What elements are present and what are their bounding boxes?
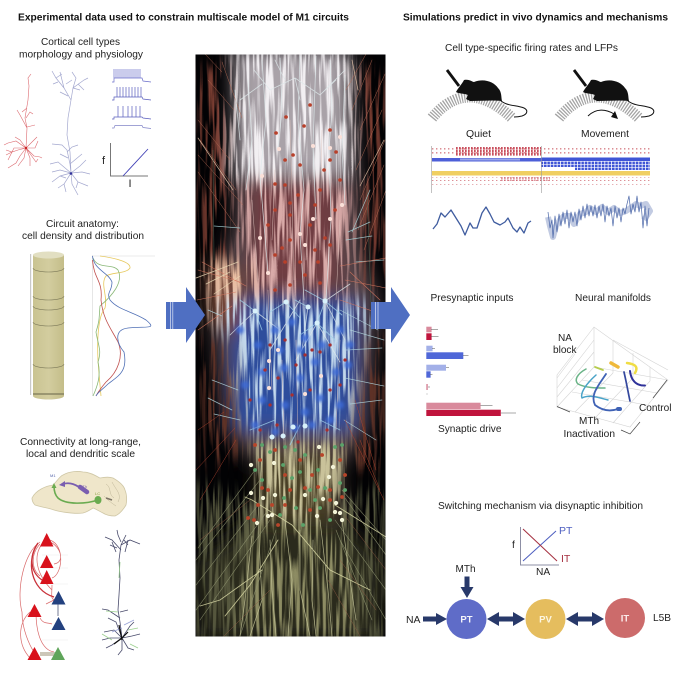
heading: cortical cell types xyxy=(19,37,144,60)
arrow: data into model xyxy=(166,287,205,343)
heading: switching mechanism: Switching mechanism via disynaptic inhibition xyxy=(438,501,643,512)
blue somata xyxy=(240,322,350,432)
panel: circuit anatomy xyxy=(22,219,155,400)
heading: cortical cell types: morphology and physiology xyxy=(19,50,144,60)
node: IT: IT xyxy=(621,614,629,624)
mouse, movement xyxy=(574,70,654,117)
LFP trace, quiet xyxy=(433,207,531,235)
arrow: PV to IT xyxy=(566,612,604,626)
wheel, quiet xyxy=(432,97,512,118)
bar chart xyxy=(426,327,516,416)
labels: manifold axes: Control xyxy=(639,403,672,414)
red somata xyxy=(268,105,340,290)
LFP trace, movement xyxy=(548,196,650,238)
heading: neural manifolds: Neural manifolds xyxy=(575,293,651,304)
apical dendrites xyxy=(230,56,350,445)
labels: quiet, movement xyxy=(466,129,629,140)
label: NA input: NA xyxy=(406,615,421,626)
cortical column cylinder xyxy=(30,252,64,400)
reconstructed dendritic neuron xyxy=(102,530,140,655)
movement arrow xyxy=(588,110,618,119)
streaked fibers xyxy=(195,50,386,640)
heading: firing rates: Cell type-specific firing rates and LFPs xyxy=(445,43,618,54)
heading: presynaptic inputs: Presynaptic inputs xyxy=(430,293,514,304)
3D manifold plot xyxy=(557,327,668,434)
panel: switching mechanism xyxy=(406,501,671,639)
f-NA plot: NA xyxy=(536,567,550,578)
title: experimental data: Experimental data used to constrain multiscale model of M1 circuits xyxy=(18,12,350,24)
heading: cortical cell types: Cortical cell types xyxy=(41,37,120,48)
mouse brain schematic xyxy=(32,471,127,516)
cell density curves xyxy=(92,255,155,396)
fan strands xyxy=(196,54,386,636)
node: PV: PV xyxy=(539,614,552,626)
labels: manifold axes: NA xyxy=(558,333,572,344)
f-NA plot: IT xyxy=(561,553,571,565)
heading: circuit anatomy: Circuit anatomy: xyxy=(46,219,119,230)
panel: central simulated circuit xyxy=(195,50,386,640)
f-I curve: I xyxy=(128,178,132,190)
labels: quiet, movement: Quiet xyxy=(466,129,491,140)
heading: connectivity xyxy=(20,437,141,460)
red neuron morphology xyxy=(4,74,42,168)
green and red lower somata xyxy=(255,445,345,525)
mouse brain schematic: MTh xyxy=(79,484,87,489)
panel: neural manifolds xyxy=(553,293,672,440)
spike traces xyxy=(112,69,151,128)
mouse brain schematic: M1 xyxy=(50,473,56,478)
arrow: NA to PT xyxy=(423,613,447,625)
labels: manifold axes xyxy=(553,333,672,440)
base glow xyxy=(195,50,386,640)
mouse brain schematic: LC xyxy=(95,491,100,496)
labels: manifold axes: Inactivation xyxy=(564,429,615,440)
labels: manifold axes: block xyxy=(553,345,577,356)
f-NA plot: f xyxy=(512,540,515,551)
arrow: MTh to PT xyxy=(460,576,474,598)
panel: cortical cell types xyxy=(4,37,151,195)
label: MTh input: MTh xyxy=(456,564,476,575)
arrow: PT to PV xyxy=(487,612,525,626)
blue neuron morphology xyxy=(50,71,90,195)
node: PT xyxy=(446,599,486,639)
node: IT xyxy=(605,598,645,638)
heading: connectivity: Connectivity at long-range, xyxy=(20,437,141,448)
panel: connectivity xyxy=(20,437,141,660)
labels: quiet, movement: Movement xyxy=(581,129,629,140)
node: PT: PT xyxy=(460,614,473,626)
f-NA plot xyxy=(512,525,573,578)
spike raster xyxy=(432,146,650,193)
panel: firing rates and LFPs xyxy=(432,43,654,238)
arrow: model to simulations xyxy=(371,287,410,343)
panel: presynaptic inputs xyxy=(426,293,516,435)
f-NA plot: PT xyxy=(559,525,573,537)
node: PV xyxy=(526,599,566,639)
f-I curve xyxy=(102,143,148,190)
wheel, movement xyxy=(559,97,639,118)
title: simulations: Simulations predict in vivo dynamics and mechanisms xyxy=(403,12,669,24)
heading: circuit anatomy: cell density and distribution xyxy=(22,231,144,242)
bright somata xyxy=(260,137,342,394)
labels: manifold axes: MTh xyxy=(579,416,599,427)
mouse, quiet xyxy=(447,70,527,117)
label: L5B: L5B xyxy=(653,613,671,624)
heading: circuit anatomy xyxy=(22,219,144,242)
heading: connectivity: local and dendritic scale xyxy=(26,449,135,460)
cell-type connectivity network xyxy=(20,533,68,660)
label: synaptic drive: Synaptic drive xyxy=(438,424,502,435)
f-I curve: f xyxy=(102,155,106,167)
